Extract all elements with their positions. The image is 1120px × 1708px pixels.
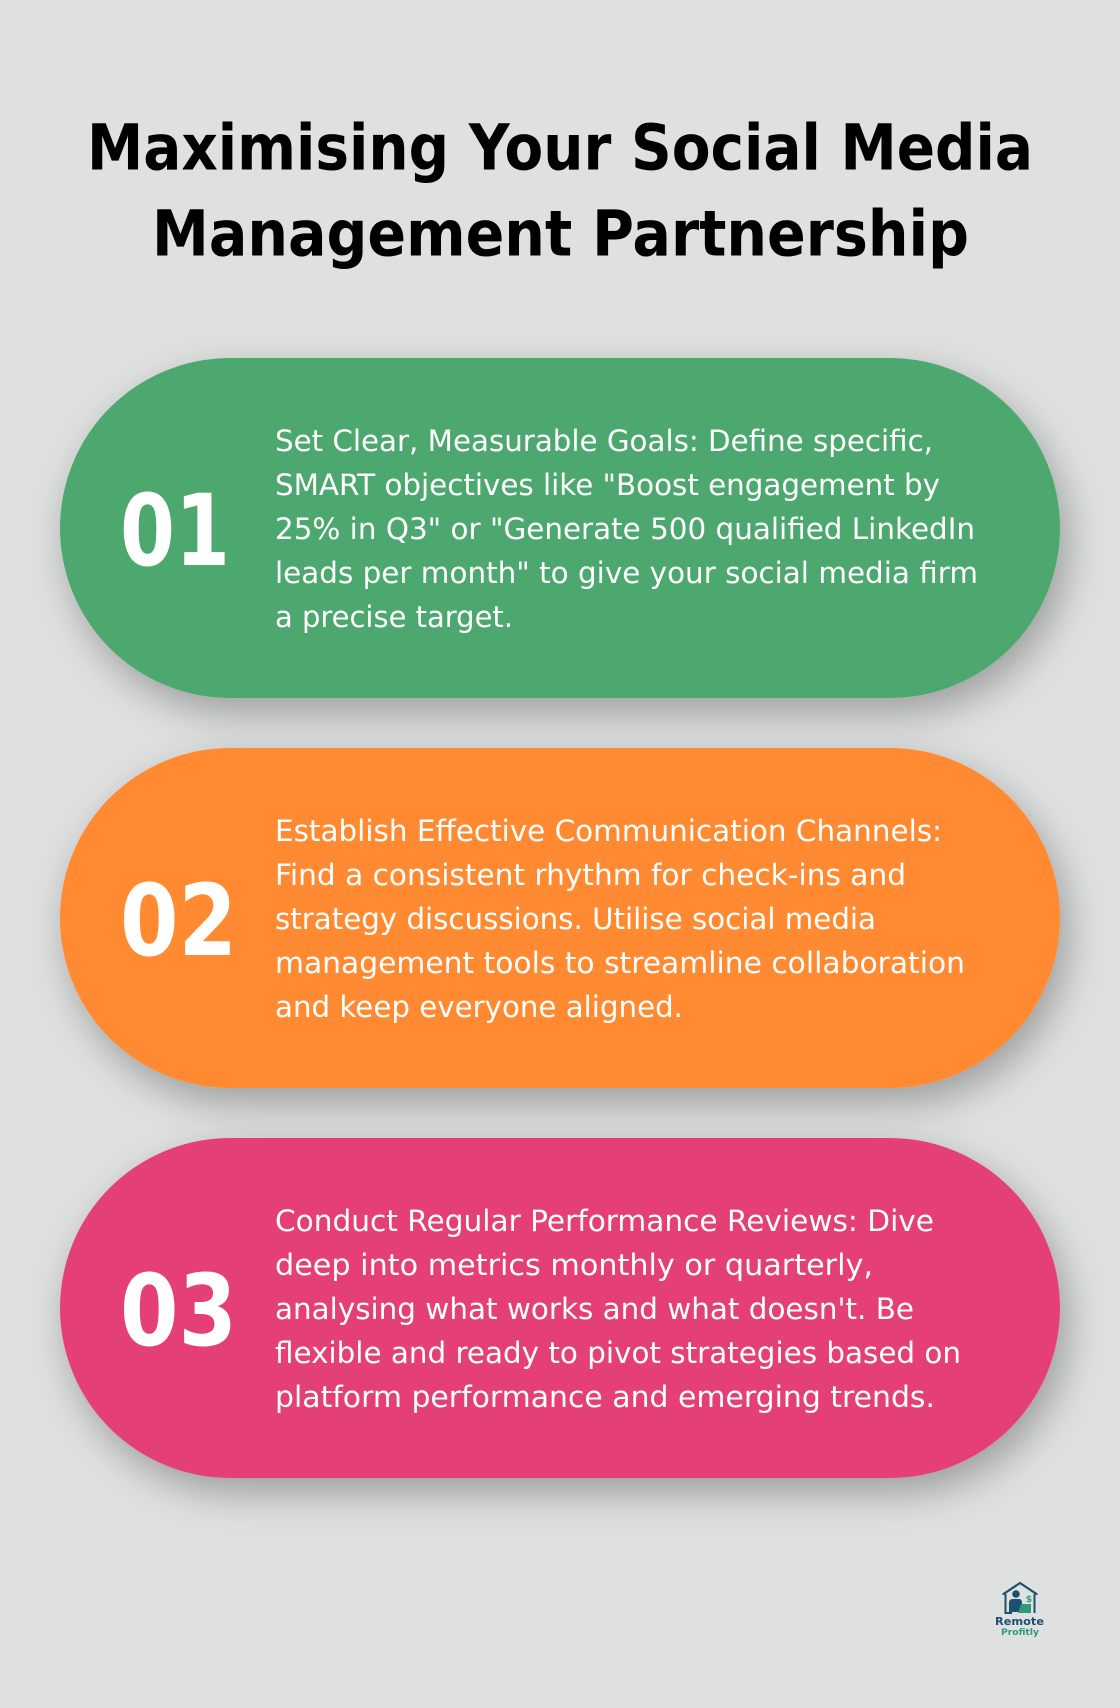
text: communication channels: strategy discussions. Utilise social media: [275, 902, 876, 936]
panel: step 01: [60, 358, 1060, 698]
pill: orange background: [60, 748, 1060, 1088]
text: communication channels: management tools to streamline collaboration: [275, 946, 965, 980]
title: Maximising Your Social Media: [87, 112, 1033, 184]
pill: green background: [60, 358, 1060, 698]
panel: step 03: [60, 1138, 1060, 1478]
pill: pink background: [60, 1138, 1060, 1478]
text: set clear goals: leads per month" to give your social media firm: [275, 556, 978, 590]
panel: step 02: [60, 748, 1060, 1088]
wordmark: [995, 1615, 1044, 1638]
text: communication channels: Find a consistent rhythm for check-ins and: [275, 858, 906, 892]
text: performance reviews: Conduct Regular Performance Reviews: Dive: [275, 1204, 934, 1238]
title: [87, 112, 1033, 270]
text: set clear goals: a precise target.: [275, 600, 513, 634]
text: communication channels: Establish Effective Communication Channels:: [275, 814, 942, 848]
text: set clear goals: 25% in Q3" or "Generate 500 qualified LinkedIn: [275, 512, 975, 546]
text: set clear goals: SMART objectives like "Boost engagement by: [275, 468, 940, 502]
number 01: 01: [120, 474, 230, 589]
title: Management Partnership: [152, 198, 969, 270]
icon: house with person and laptop: $: [1026, 1595, 1032, 1605]
text: communication channels: and keep everyone aligned.: [275, 990, 683, 1024]
text: communication channels: [275, 814, 965, 1024]
text: performance reviews: analysing what works and what doesn't. Be: [275, 1292, 914, 1326]
text: performance reviews: deep into metrics monthly or quarterly,: [275, 1248, 873, 1282]
logo: Remote Profitly: [995, 1583, 1044, 1638]
text: performance reviews: flexible and ready to pivot strategies based on: [275, 1336, 961, 1370]
text: performance reviews: platform performance and emerging trends.: [275, 1380, 935, 1414]
wordmark: Profitly: [1001, 1628, 1039, 1638]
number 03: 03: [120, 1254, 237, 1369]
text: set clear goals: Set Clear, Measurable Goals: Define specific,: [275, 424, 933, 458]
text: set clear goals: [275, 424, 978, 634]
number 02: 02: [120, 864, 237, 979]
wordmark: Remote: [995, 1615, 1044, 1628]
text: performance reviews: [275, 1204, 961, 1414]
